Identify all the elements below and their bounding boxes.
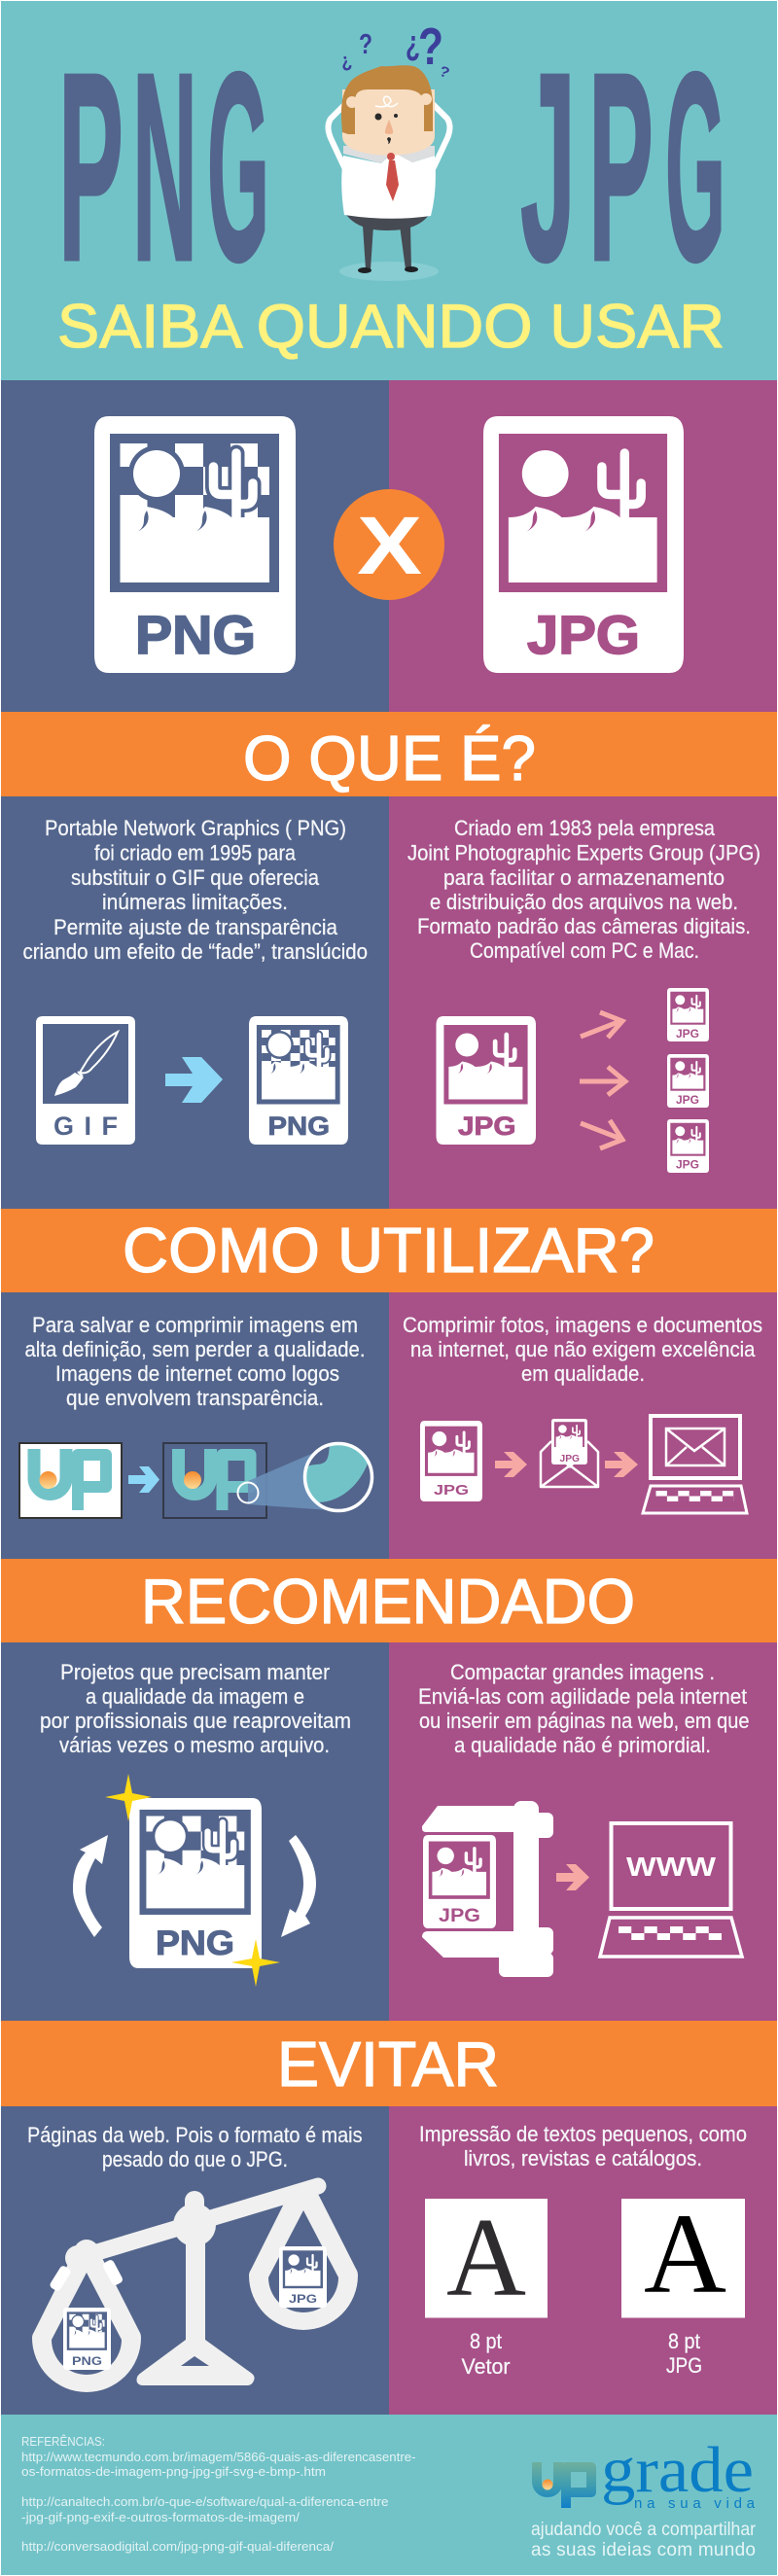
references: os-formatos-de-imagem-png-jpg-gif-svg-e-bmp-.htm: [21, 2464, 326, 2479]
icon: JPG file: JPG: [434, 1482, 469, 1499]
icons: small JPG files: JPG: [676, 1157, 699, 1171]
text block: Enviá-las com agilidade pela internet: [418, 1684, 747, 1709]
sample: JPG A: [621, 2190, 745, 2318]
logo: upgrade: [537, 2434, 756, 2512]
icon: scale: [32, 2186, 358, 2392]
text block: foi criado em 1995 para: [94, 840, 297, 865]
icon: JPG on scale: [279, 2246, 327, 2308]
text block: Formato padrão das câmeras digitais.: [417, 914, 751, 938]
text block: [403, 1313, 762, 1386]
sample: vector A: [425, 2196, 548, 2319]
text block: na internet, que não exigem excelência: [410, 1337, 756, 1361]
references: http://canaltech.com.br/o-que-e/software/qual-a-diferenca-entre: [21, 2494, 389, 2509]
text block: Compactar grandes imagens .: [450, 1660, 715, 1684]
icon: PNG file with sparkles: PNG: [156, 1924, 234, 1962]
text block: [25, 1313, 366, 1410]
icon: envelope: JPG: [560, 1454, 580, 1464]
question marks: ?: [359, 29, 372, 60]
text block: alta definição, sem perder a qualidade.: [25, 1337, 366, 1361]
icon: scale: JPG: [289, 2294, 317, 2306]
label: vector: Vetor: [461, 2354, 510, 2379]
arrows: rotation: [73, 1835, 316, 1937]
icon: JPG file: JPG: [458, 1112, 515, 1141]
arrow: [556, 1864, 589, 1890]
text block: por profissionais que reaproveitam: [40, 1709, 351, 1733]
section heading: O QUE É?: O QUE É?: [243, 723, 536, 794]
logo: upgrade: na sua vida: [634, 2495, 756, 2512]
section heading: COMO UTILIZAR?: COMO UTILIZAR?: [123, 1215, 654, 1286]
icons: small JPG files: JPG: [676, 1093, 699, 1107]
text block: [27, 2123, 362, 2171]
text block: [40, 1660, 351, 1757]
references: REFERÊNCIAS:: [21, 2434, 105, 2449]
panel: recomendado, JPG: [389, 1642, 777, 2021]
question marks: ¿: [406, 22, 420, 62]
panel: como utilizar, PNG: [1, 1292, 389, 1559]
text block: [407, 816, 760, 963]
question marks: [337, 18, 451, 82]
header panel: G: [207, 18, 269, 317]
icons: small JPG files: JPG: [676, 1027, 699, 1041]
text block: criando um efeito de “fade”, translúcido: [23, 939, 368, 964]
label: JPG: 8 pt: [668, 2329, 700, 2353]
panel: PNG versus JPG: [1, 380, 777, 712]
text block: livros, revistas e catálogos.: [464, 2146, 702, 2170]
versus badge: X: [357, 500, 422, 591]
sample: vector A: A: [446, 2196, 526, 2319]
text block: Projetos que precisam manter: [60, 1660, 330, 1684]
icon: PNG file small: PNG: [268, 1112, 330, 1141]
icon: GIF file: [36, 1016, 135, 1145]
text block: Imagens de internet como logos: [55, 1361, 339, 1386]
illustration: confused man: [329, 18, 451, 281]
text block: inúmeras limitações.: [102, 890, 288, 914]
arrow: [128, 1466, 159, 1493]
text block: e distribuição dos arquivos na web.: [430, 890, 738, 914]
header panel: [1, 1, 777, 380]
references: http://conversaodigital.com/jpg-png-gif-qual-diferenca/: [21, 2539, 334, 2554]
panel: evitar, JPG: [389, 2106, 777, 2415]
arrows: open pink: [580, 1012, 625, 1148]
section heading: COMO UTILIZAR?: [1, 1209, 777, 1292]
icon: PNG file small: [249, 1016, 348, 1145]
icon: computer with envelope: [643, 1416, 747, 1513]
label: vector: [461, 2329, 510, 2379]
label: JPG: JPG: [666, 2353, 702, 2378]
tagline: [531, 2520, 757, 2560]
heading: PNG: P: [58, 18, 124, 317]
text block: Criado em 1983 pela empresa: [454, 816, 716, 840]
text block: em qualidade.: [521, 1361, 645, 1386]
text block: a qualidade da imagem e: [86, 1684, 304, 1709]
arrow: [165, 1057, 223, 1103]
text block: substituir o GIF que oferecia: [71, 865, 320, 890]
icon: computer with WWW: [600, 1823, 742, 1957]
heading: PNG: N: [132, 18, 197, 317]
tagline: as suas ideias com mundo: [531, 2540, 756, 2560]
text block: várias vezes o mesmo arquivo.: [59, 1733, 330, 1757]
icon: PNG file: [94, 416, 296, 673]
text block: a qualidade não é primordial.: [454, 1733, 711, 1757]
tagline: ajudando você a compartilhar: [531, 2520, 757, 2540]
panel: evitar, PNG: [1, 2106, 389, 2415]
text block: Compatível com PC e Mac.: [470, 938, 699, 963]
text block: Portable Network Graphics ( PNG): [45, 816, 346, 840]
text block: ou inserir em páginas na web, em que: [419, 1709, 749, 1733]
text block: Para salvar e comprimir imagens em: [32, 1313, 358, 1337]
icon: scale: PNG: [72, 2356, 102, 2368]
icon: GIF file: GIF: [53, 1112, 118, 1141]
text block: pesado do que o JPG.: [102, 2147, 288, 2171]
heading: JPG: J: [520, 18, 576, 317]
arrow: [605, 1452, 638, 1477]
icon: PNG file: PNG: [135, 604, 256, 665]
logo with background: [19, 1443, 122, 1518]
versus badge: [334, 489, 444, 600]
text block: que envolvem transparência.: [66, 1386, 324, 1410]
panel: o que é, PNG: [1, 796, 389, 1209]
panel: recomendado, PNG: [1, 1642, 389, 2021]
text block: Páginas da web. Pois o formato é mais: [27, 2123, 362, 2147]
panel: o que é, JPG: [389, 796, 777, 1209]
panel: como utilizar, JPG: [389, 1292, 777, 1559]
footer panel: [1, 2415, 777, 2575]
icon: JPG file: [483, 416, 684, 673]
text block: Impressão de textos pequenos, como: [419, 2122, 747, 2146]
question marks: ?: [418, 18, 443, 76]
references: [21, 2434, 415, 2554]
icon: press compressing JPG: JPG: [439, 1906, 480, 1926]
icon: JPG file: JPG: [527, 604, 640, 665]
section heading: RECOMENDADO: [1, 1559, 777, 1642]
references: http://www.tecmundo.com.br/imagem/5866-quais-as-diferencasentre-: [21, 2450, 415, 2464]
icon: computer with WWW: WWW: [626, 1852, 717, 1882]
references: -jpg-gif-png-exif-e-outros-formatos-de-imagem/: [21, 2510, 300, 2524]
heading: JPG: P: [588, 18, 654, 317]
icon: JPG file: [420, 1421, 482, 1501]
icons: small JPG files: [667, 988, 709, 1173]
section heading: EVITAR: [1, 2021, 777, 2106]
logo transparent with magnifier: [163, 1443, 371, 1518]
sample: JPG A: A: [644, 2190, 726, 2317]
text block: [418, 1660, 749, 1757]
section heading: RECOMENDADO: RECOMENDADO: [141, 1566, 635, 1637]
text block: Comprimir fotos, imagens e documentos: [403, 1313, 762, 1337]
text block: Permite ajuste de transparência: [53, 915, 338, 939]
arrow: [495, 1452, 527, 1477]
subtitle: SAIBA QUANDO USAR: [57, 293, 725, 361]
icon: envelope: [541, 1419, 598, 1487]
question marks: ?: [437, 63, 451, 82]
text block: [23, 816, 368, 964]
label: JPG: [666, 2329, 702, 2378]
label: vector: 8 pt: [470, 2329, 502, 2353]
section heading: O QUE É?: [1, 712, 777, 796]
icon: JPG file: [436, 1016, 536, 1145]
logo: upgrade: grade: [601, 2434, 754, 2506]
icon: PNG on scale: [63, 2308, 111, 2370]
section heading: EVITAR: EVITAR: [277, 2029, 499, 2100]
icon: press compressing JPG: [422, 1801, 553, 1977]
text block: [419, 2122, 747, 2170]
question marks: ¿: [337, 49, 354, 73]
icon: PNG file with sparkles: [105, 1774, 280, 1987]
text block: para facilitar o armazenamento: [443, 865, 725, 890]
